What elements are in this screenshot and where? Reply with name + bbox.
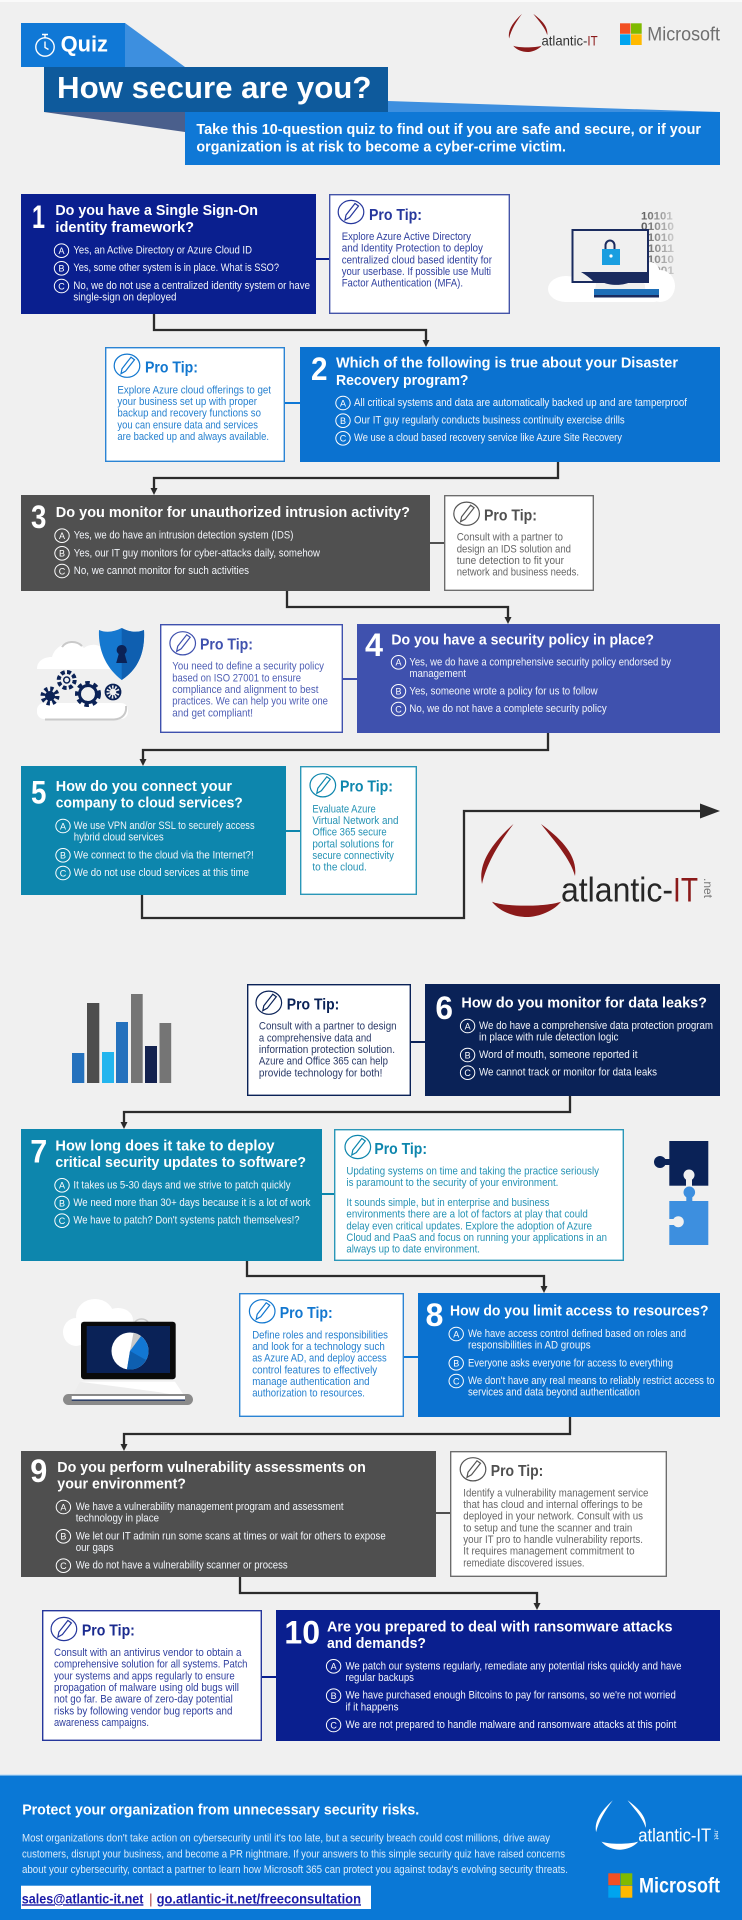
tip text: your systems and apps regularly to ensure	[54, 1670, 235, 1682]
question 7 answers: C	[59, 1216, 66, 1226]
icon: pencil	[338, 200, 364, 224]
panel: pro tip 2	[106, 348, 300, 461]
tip text: Consult with a partner to design	[259, 1021, 397, 1033]
question 3 answers: No, we cannot monitor for such activities	[74, 565, 250, 577]
question 6 answers: C	[464, 1068, 471, 1078]
tip text: risks by following vendor bug reports and	[54, 1705, 232, 1717]
tip text: are backed up and always available.	[117, 431, 269, 443]
tip text	[259, 1021, 397, 1079]
tip text: your business set up with proper	[117, 396, 257, 408]
question 6 answers: We cannot track or monitor for data leaks	[479, 1067, 658, 1079]
panel: question 6	[425, 984, 720, 1096]
question 10 answers: regular backups	[346, 1672, 415, 1684]
question 5 heading: company to cloud services?	[56, 795, 243, 812]
tip text: is paramount to the security of your environment.	[346, 1177, 558, 1189]
question 10 heading: and demands?	[327, 1635, 426, 1652]
question 10 heading: 10	[284, 1614, 320, 1650]
icon: pencil	[114, 354, 140, 377]
question 9 answers: B	[60, 1532, 66, 1542]
question 2 answers: A	[340, 398, 346, 408]
logo: Microsoft footer	[608, 1873, 720, 1898]
title: How secure are you?	[57, 70, 372, 105]
logo: atlantic-IT footer: .net	[712, 1829, 719, 1840]
question 3 answers: Yes, our IT guy monitors for cyber-attacks daily, somehow	[74, 547, 320, 559]
question 4 answers: B	[395, 687, 402, 697]
question 2 answers: We use a cloud based recovery service like Azure Site Recovery	[354, 432, 623, 444]
question 7 answers: We have to patch? Don't systems patch themselves!?	[73, 1215, 300, 1227]
question 3 answers: C	[59, 566, 66, 576]
question 4 answers: No, we do not have a complete security policy	[409, 703, 607, 715]
tip text: as Azure AD, and deploy access	[252, 1353, 387, 1365]
tip text: centralized cloud based identity for	[342, 254, 492, 266]
logo: atlantic-IT footer: atlantic-IT	[638, 1826, 711, 1846]
question 1 heading	[32, 199, 258, 236]
question 1 answers: No, we do not use a centralized identity system or have	[73, 280, 310, 292]
panel: pro tip 3	[445, 496, 593, 590]
question 2 heading: Which of the following is true about your Disaster	[336, 355, 678, 372]
question 8 answers: Everyone asks everyone for access to everything	[468, 1357, 673, 1369]
question 1 answers: B	[58, 264, 65, 274]
question 10 answers	[326, 1660, 682, 1732]
question 7 answers: B	[59, 1198, 65, 1208]
question 8 answers: services and data beyond authentication	[468, 1387, 640, 1399]
panel: pro tip 5	[301, 767, 416, 894]
question 8 answers: responsibilities in AD groups	[468, 1340, 591, 1352]
tip text: manage authentication and	[252, 1376, 370, 1388]
question 5 heading: How do you connect your	[56, 778, 232, 795]
question 10 answers: A	[331, 1662, 337, 1672]
arrow: question 6 to 7	[120, 1096, 570, 1129]
panel: pro tip 1: Pro Tip:	[369, 207, 422, 224]
panel: question 8	[418, 1293, 720, 1417]
question 4 answers: C	[395, 704, 402, 714]
tip text: deployed in your network. Consult with us	[463, 1511, 644, 1523]
tip text	[117, 384, 271, 443]
quiz tag: Quiz	[61, 32, 108, 57]
question 5 heading: 5	[31, 774, 46, 810]
question 5 answers: C	[60, 868, 67, 878]
subtitle banner: Take this 10-question quiz to find out if you are safe and secure, or if your	[196, 122, 701, 138]
logo: Microsoft header	[620, 23, 721, 46]
logo: atlantic-IT large: .net	[701, 878, 715, 899]
question 3 answers: A	[59, 531, 65, 541]
arrow: question 3 to 4	[287, 591, 512, 624]
question 6 heading: 6	[435, 990, 453, 1026]
tip text: network and business needs.	[457, 567, 579, 579]
tip text: to setup and tune the scanner and train	[463, 1522, 632, 1534]
question 9 answers: We let our IT admin run some scans at times or wait for others to expose	[76, 1530, 386, 1542]
panel: pro tip 9: Pro Tip:	[491, 1463, 543, 1480]
tip text: backup and recovery functions so	[117, 408, 261, 420]
panel: pro tip 5: Pro Tip:	[340, 779, 393, 796]
question 3 heading	[31, 499, 410, 535]
icon: laptop with pie chart	[63, 1299, 193, 1405]
icon: pencil	[256, 991, 282, 1014]
question 5 answers: We do not use cloud services at this time	[74, 867, 249, 879]
tip text: Define roles and responsibilities	[252, 1329, 389, 1341]
tip text: You need to define a security policy	[172, 661, 325, 673]
contact links: |	[149, 1890, 153, 1906]
tip text: Azure and Office 365 can help	[259, 1056, 388, 1068]
question 8 answers: B	[453, 1359, 459, 1369]
question 2 answers: C	[340, 434, 347, 444]
panel: pro tip 8	[240, 1294, 418, 1416]
tip text	[463, 1487, 648, 1569]
arrow: question 1 to 2	[154, 314, 430, 347]
icon: stopwatch	[36, 34, 54, 56]
tip text: that has cloud and internal offerings to be	[463, 1499, 643, 1511]
panel: pro tip 9	[451, 1452, 666, 1576]
tip text: secure connectivity	[312, 850, 395, 862]
tip text: comprehensive solution for all systems. Patch	[54, 1659, 248, 1671]
panel: pro tip 3: Pro Tip:	[484, 508, 537, 525]
question 10 heading	[284, 1614, 672, 1652]
tip text: you can ensure data and services	[117, 419, 259, 431]
contact links: sales@atlantic-it.net	[22, 1890, 144, 1906]
question 1 heading: Do you have a Single Sign-On	[55, 202, 258, 219]
tip text: and look for a technology such	[252, 1341, 385, 1353]
tip text: always up to date environment.	[346, 1244, 480, 1256]
tip text: Cloud and PaaS and focus on running your applications in an	[346, 1232, 607, 1244]
panel: question 1	[21, 194, 329, 314]
question 5 answers: A	[60, 821, 66, 831]
tip text	[457, 532, 579, 579]
panel: question 3	[21, 495, 444, 591]
question 4 answers: Yes, someone wrote a policy for us to follow	[409, 685, 598, 697]
tip text: Factor Authentication (MFA).	[342, 278, 463, 290]
question 6 answers: B	[465, 1050, 471, 1060]
tip text	[172, 661, 328, 719]
tip text: delay even critical updates. Explore the adoption of Azure	[346, 1220, 592, 1232]
question 7 heading	[30, 1134, 306, 1171]
question 6 heading	[435, 990, 707, 1026]
question 1 answers: Yes, an Active Directory or Azure Cloud ID	[73, 245, 252, 257]
panel: pro tip 7	[335, 1130, 623, 1260]
contact links: go.atlantic-it.net/freeconsultation	[157, 1890, 361, 1906]
tip text: It sounds simple, but in enterprise and business	[346, 1197, 550, 1209]
footer text: customers, disrupt your business, and become a PR nightmare. If your answers to this simple security quiz have raised concerns	[22, 1848, 566, 1860]
icon: pencil	[170, 632, 196, 655]
tip text: environments there are a lot of factors at play that could	[346, 1209, 588, 1221]
question 8 heading: 8	[426, 1297, 443, 1333]
tip text: Office 365 secure	[312, 827, 387, 839]
arrow: question 7 to 8	[247, 1261, 548, 1293]
tip text: Virtual Network and	[312, 815, 398, 827]
panel: question 10	[276, 1610, 720, 1741]
question 2 heading	[311, 351, 678, 389]
question 7 answers: It takes us 5-30 days and we strive to patch quickly	[73, 1179, 291, 1191]
logo: Microsoft footer: Microsoft	[639, 1874, 720, 1897]
logo: atlantic-IT header: atlantic-	[542, 33, 588, 49]
tip text	[312, 803, 398, 874]
footer text: about your cybersecurity, contact a partner to learn how Microsoft 365 can protect you against today's evolving security threats.	[22, 1864, 568, 1876]
panel: question 2	[300, 347, 720, 462]
question 8 answers	[449, 1327, 715, 1399]
tip text: your IT pro to handle vulnerability reports.	[463, 1534, 643, 1546]
question 3 heading: Do you monitor for unauthorized intrusion activity?	[56, 504, 410, 521]
question 4 answers: Yes, we do have a comprehensive security policy endorsed by	[409, 656, 672, 668]
quiz tag	[21, 23, 185, 67]
question 6 answers: We do have a comprehensive data protection program	[479, 1020, 713, 1032]
tip text: information protection solution.	[259, 1044, 395, 1056]
tip text: not go far. Be aware of zero-day potential	[54, 1694, 233, 1706]
tip text: Identify a vulnerability management service	[463, 1487, 648, 1499]
tip text: compliance and alignment to best	[172, 684, 318, 696]
subtitle banner: organization is at risk to become a cyber-crime victim.	[196, 140, 566, 156]
question 7 answers: A	[59, 1181, 65, 1191]
tip text: and Identity Protection to deploy	[342, 243, 484, 255]
panel: pro tip 10: Pro Tip:	[82, 1623, 135, 1640]
icon: puzzle pieces	[654, 1141, 708, 1245]
logo: atlantic-IT header	[509, 14, 598, 52]
tip text	[342, 231, 492, 290]
question 5 answers: hybrid cloud services	[74, 832, 164, 844]
tip text: a comprehensive data and	[259, 1032, 372, 1044]
question 9 answers: A	[60, 1502, 66, 1512]
tip text: based on ISO 27001 to ensure	[172, 672, 301, 684]
question 8 heading: How do you limit access to resources?	[450, 1303, 708, 1320]
question 9 heading: Do you perform vulnerability assessments on	[57, 1459, 366, 1476]
question 8 heading	[426, 1297, 708, 1333]
question 7 heading: critical security updates to software?	[55, 1154, 306, 1171]
question 1 answers: C	[58, 281, 65, 291]
question 2 answers	[336, 396, 688, 445]
question 9 answers: We do not have a vulnerability scanner or process	[76, 1560, 288, 1572]
question 6 answers: A	[465, 1021, 471, 1031]
panel: question 9	[21, 1451, 450, 1577]
question 4 heading: Do you have a security policy in place?	[391, 631, 654, 648]
arrow: question 8 to 9	[120, 1417, 570, 1451]
question 4 answers: A	[395, 658, 402, 668]
question 9 heading: 9	[30, 1453, 47, 1489]
question 2 heading: Recovery program?	[336, 372, 468, 389]
tip text: Evaluate Azure	[312, 803, 376, 815]
icon: laptop with padlock and binary: 01011	[641, 243, 674, 255]
tip text	[54, 1647, 248, 1729]
arrow: question 5 to next column	[142, 804, 720, 918]
tip text: It requires management commitment to	[463, 1546, 635, 1558]
question 1 heading: 1	[32, 199, 45, 235]
question 3 answers: Yes, we do have an intrusion detection system (IDS)	[74, 530, 293, 542]
tip text: practices. We can help you write one	[172, 696, 328, 708]
footer text: Most organizations don't take action on cybersecurity until it's too late, but a security breach could cost millions, drive away	[22, 1833, 551, 1845]
tip text: and get compliant!	[172, 707, 253, 719]
question 1 answers	[54, 244, 310, 304]
panel: pro tip 4	[161, 625, 357, 732]
tip text: to the cloud.	[312, 862, 367, 874]
panel: pro tip 8: Pro Tip:	[280, 1305, 333, 1322]
icon: pencil	[51, 1617, 77, 1641]
panel: pro tip 6	[248, 985, 425, 1095]
panel: footer	[0, 1774, 742, 1920]
logo: atlantic-IT large: atlantic-	[561, 872, 673, 910]
tip text: awareness campaigns.	[54, 1717, 149, 1729]
question 7 answers	[55, 1178, 311, 1227]
question 5 answers: We connect to the cloud via the Internet?!	[74, 849, 254, 861]
question 10 answers: if it happens	[346, 1701, 399, 1713]
question 5 answers: B	[60, 851, 66, 861]
question 6 answers: Word of mouth, someone reported it	[479, 1049, 638, 1061]
panel: question 7	[21, 1129, 334, 1261]
question 8 answers: We don't have any real means to reliably restrict access to	[468, 1375, 715, 1387]
icon: pencil	[345, 1135, 371, 1159]
tip text: your userbase. If possible use Multi	[342, 266, 491, 278]
question 1 answers: Yes, some other system is in place. What is SSO?	[73, 262, 279, 274]
logo: atlantic-IT header: IT	[587, 33, 598, 49]
question 1 answers: A	[58, 246, 65, 256]
icon: laptop with padlock and binary	[548, 210, 675, 302]
question 6 answers	[460, 1019, 713, 1079]
tip text	[346, 1165, 607, 1256]
question 9 heading	[30, 1453, 366, 1493]
panel: pro tip 10	[43, 1611, 276, 1740]
question 10 answers: We patch our systems regularly, remediate any potential risks quickly and have	[346, 1660, 682, 1672]
question 6 answers: in place with rule detection logic	[479, 1032, 619, 1044]
icon: bar chart	[72, 994, 171, 1083]
question 1 heading: identity framework?	[55, 219, 194, 236]
tip text: control features to effectively	[252, 1364, 378, 1376]
question 10 answers: We are not prepared to handle malware and ransomware attacks at this point	[346, 1719, 676, 1731]
question 1 answers: single-sign on deployed	[73, 292, 176, 304]
icon: laptop with padlock and binary: 01010	[641, 232, 674, 244]
icon: laptop with padlock and binary: 01010	[641, 221, 674, 233]
tip text: Explore Azure cloud offerings to get	[117, 384, 271, 396]
tip text: Consult with an antivirus vendor to obtain a	[54, 1647, 241, 1659]
question 10 answers: We have purchased enough Bitcoins to pay for ransoms, so we're not worried	[346, 1690, 676, 1702]
panel: pro tip 7: Pro Tip:	[374, 1141, 427, 1158]
tip text: portal solutions for	[312, 838, 394, 850]
panel: pro tip 6: Pro Tip:	[287, 996, 339, 1013]
panel: pro tip 1	[330, 195, 509, 313]
tip text: Consult with a partner to	[457, 532, 563, 544]
icon: pencil	[460, 1458, 486, 1481]
tip text: tune detection to fit your	[457, 555, 564, 567]
icon: laptop with padlock and binary: 00001	[641, 265, 674, 277]
question 4 heading: 4	[365, 627, 383, 663]
question 5 answers: We use VPN and/or SSL to securely access	[74, 820, 255, 832]
arrow: question 4 to 5	[140, 733, 548, 766]
question 3 answers	[55, 529, 320, 578]
question 10 heading: Are you prepared to deal with ransomware attacks	[327, 1618, 672, 1635]
question 9 answers: our gaps	[76, 1542, 114, 1554]
icon: pencil	[249, 1300, 275, 1323]
question 8 answers: We have access control defined based on roles and	[468, 1328, 686, 1340]
icon: laptop with padlock and binary: 01010	[641, 254, 674, 266]
logo: Microsoft header: Microsoft	[647, 25, 721, 46]
logo: atlantic-IT footer	[596, 1800, 719, 1850]
question 6 heading: How do you monitor for data leaks?	[461, 995, 707, 1012]
question 4 answers: management	[409, 668, 466, 680]
question 7 answers: We need more than 30+ days because it is a lot of work	[73, 1197, 311, 1209]
question 8 answers: A	[453, 1329, 459, 1339]
panel: question 4	[357, 624, 720, 733]
tip text: provide technology for both!	[259, 1067, 382, 1079]
footer heading: Protect your organization from unnecessary security risks.	[22, 1801, 419, 1818]
question 4 answers	[391, 656, 672, 716]
question 9 heading: your environment?	[57, 1476, 186, 1493]
arrow: question 2 to 3	[150, 462, 558, 495]
tip text: propagation of malware using old bugs will	[54, 1682, 239, 1694]
question 9 answers: We have a vulnerability management program and assessment	[76, 1501, 344, 1513]
title	[44, 67, 388, 132]
question 7 heading: 7	[30, 1134, 47, 1170]
question 4 heading	[365, 627, 654, 663]
question 9 answers: C	[60, 1561, 67, 1571]
tip text: Explore Azure Active Directory	[342, 231, 472, 243]
panel: pro tip 4: Pro Tip:	[200, 637, 253, 654]
footer text	[22, 1833, 568, 1876]
tip text: authorization to resources.	[252, 1388, 365, 1400]
question 5 answers	[56, 819, 255, 880]
panel: question 5	[21, 766, 300, 895]
icon: cloud with gears and shield	[37, 628, 144, 720]
logo: atlantic-IT large	[481, 824, 715, 917]
question 7 heading: How long does it take to deploy	[55, 1137, 275, 1154]
icon: laptop with padlock and binary: 10101	[641, 210, 673, 222]
question 2 answers: All critical systems and data are automatically backed up and are tamperproof	[354, 397, 688, 409]
question 2 answers: B	[340, 416, 346, 426]
question 10 answers: B	[331, 1691, 337, 1701]
tip text: remediate discovered issues.	[463, 1557, 584, 1569]
logo: atlantic-IT large: IT	[673, 872, 698, 910]
question 8 answers: C	[453, 1376, 460, 1386]
question 3 heading: 3	[31, 499, 46, 535]
subtitle banner	[185, 101, 720, 165]
tip text	[252, 1329, 389, 1400]
icon: pencil	[454, 502, 479, 525]
tip text: Updating systems on time and taking the practice seriously	[346, 1165, 600, 1177]
question 3 answers: B	[59, 549, 65, 559]
question 2 answers: Our IT guy regularly conducts business continuity exercise drills	[354, 415, 625, 427]
panel: pro tip 2: Pro Tip:	[145, 360, 198, 377]
question 9 answers: technology in place	[76, 1513, 159, 1525]
icon: pencil	[310, 774, 336, 797]
contact links	[21, 1886, 371, 1909]
question 9 answers	[56, 1500, 386, 1572]
question 10 answers: C	[330, 1720, 337, 1730]
question 2 heading: 2	[311, 351, 328, 387]
tip text: design an IDS solution and	[457, 543, 571, 555]
arrow: question 9 to 10	[240, 1577, 540, 1610]
question 5 heading	[31, 774, 243, 812]
